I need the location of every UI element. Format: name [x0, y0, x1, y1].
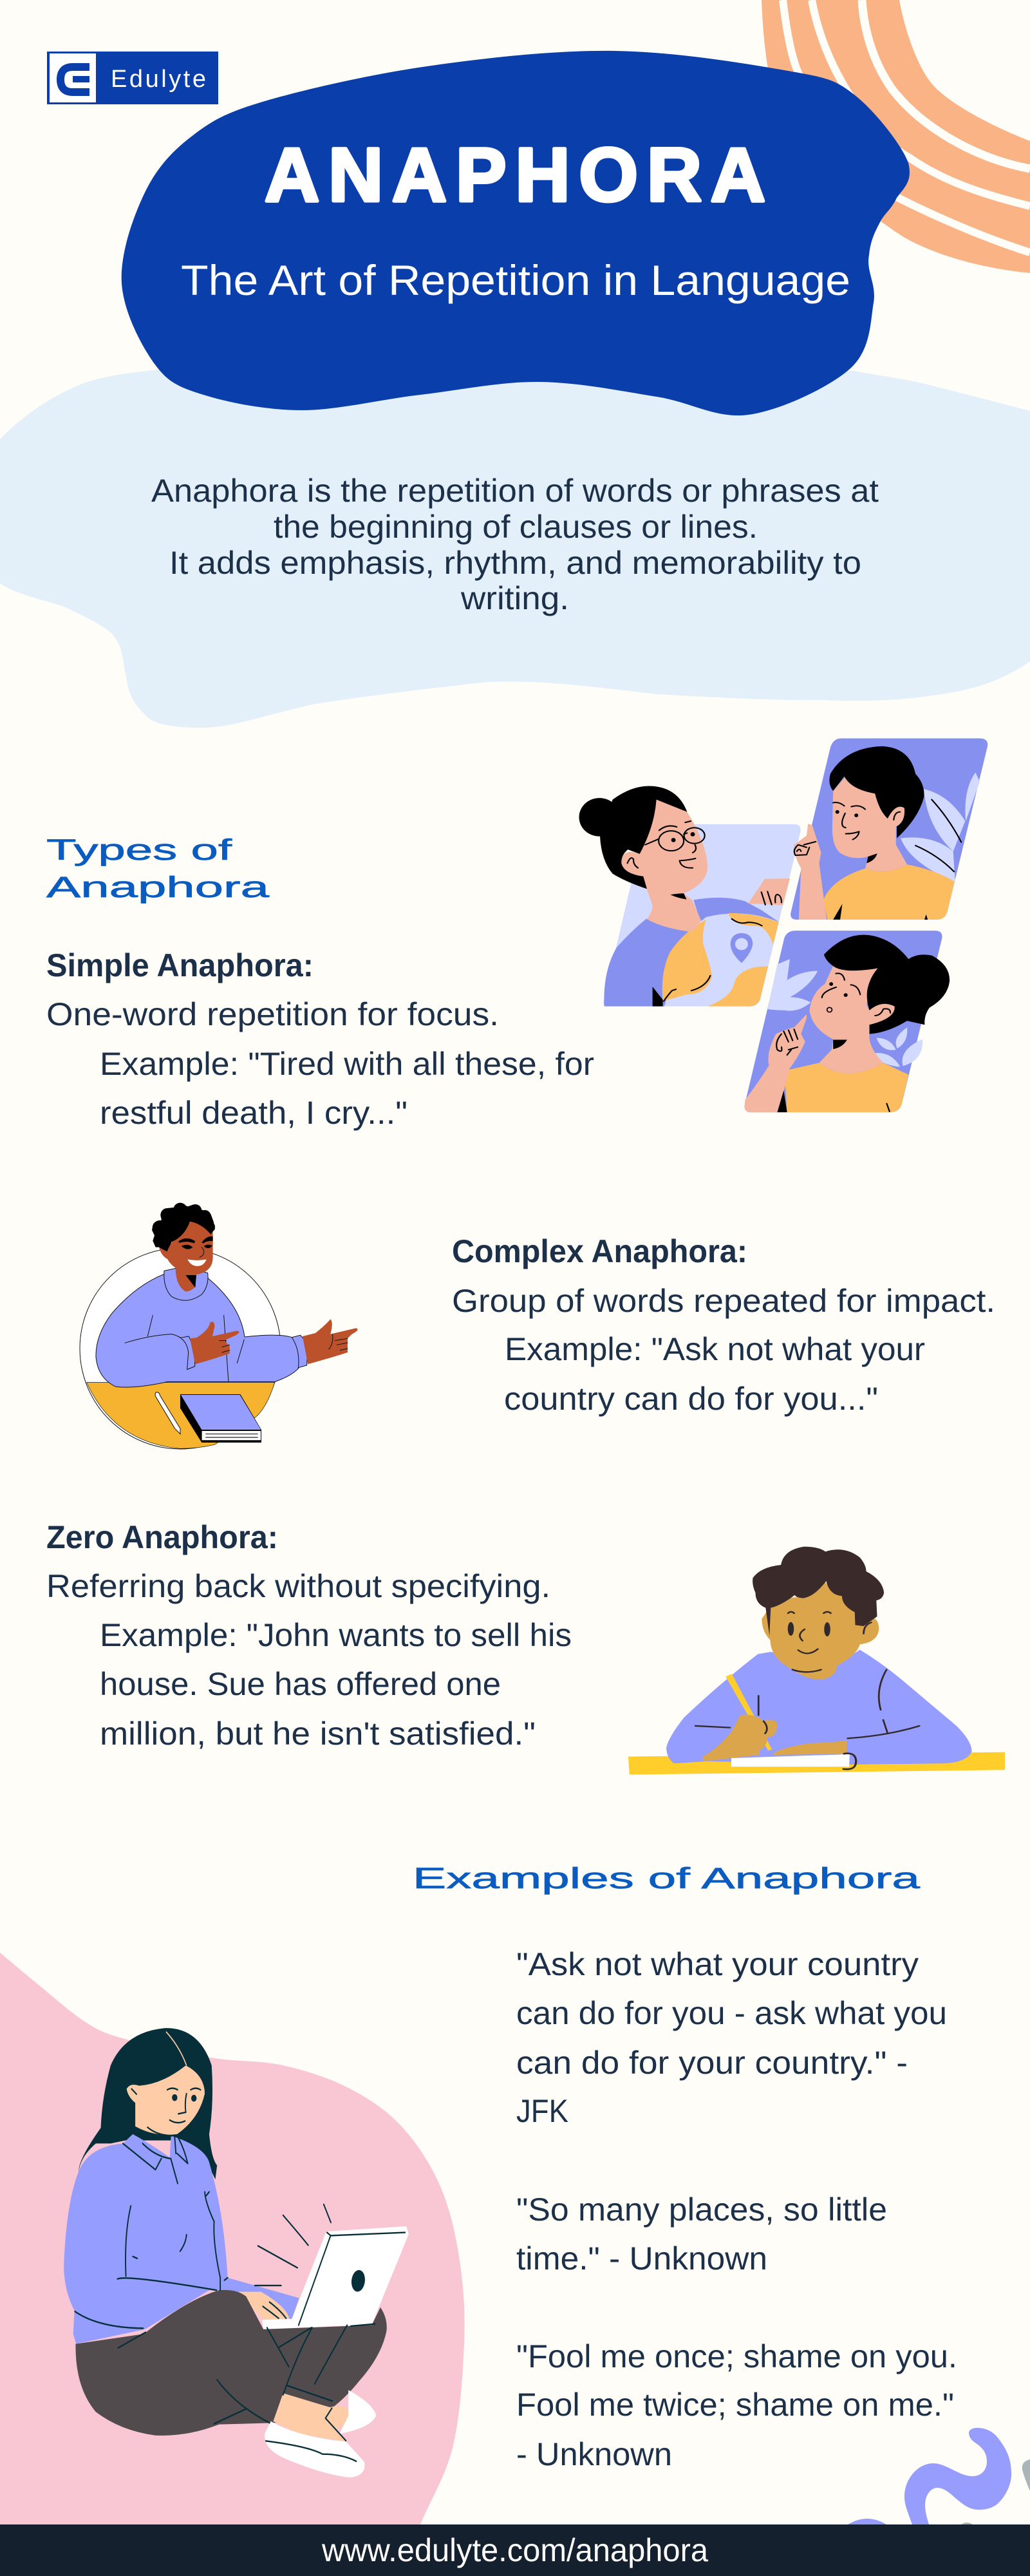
section: simple anaphora: Example: "Tired with all these, for	[100, 1046, 594, 1082]
intro text: the beginning of clauses or lines.	[274, 509, 758, 545]
section: zero anaphora: Referring back without specifying.	[46, 1568, 550, 1604]
intro text: writing.	[460, 580, 569, 616]
section: complex anaphora: country can do for you..."	[504, 1381, 878, 1417]
heading: Types of Anaphora: Anaphora	[46, 871, 270, 904]
section: complex anaphora: Complex Anaphora:	[452, 1233, 747, 1269]
section: quotes: can do for you - ask what you	[516, 1995, 947, 2031]
title: ANAPHORA	[265, 133, 765, 218]
heading: Examples of Anaphora: Examples of Anaphora	[413, 1862, 921, 1895]
section: quotes	[516, 1946, 957, 2472]
illustration: woman with laptop	[64, 2028, 409, 2477]
panel: woman with globe	[579, 786, 801, 1007]
section: simple anaphora: Simple Anaphora:	[46, 947, 314, 983]
section: zero anaphora: Zero Anaphora:	[46, 1519, 278, 1555]
illustration: three people talking	[579, 739, 988, 1112]
footer bar: www.edulyte.com/anaphora	[321, 2532, 708, 2568]
subtitle: The Art of Repetition in Language	[181, 256, 850, 304]
decoration: orange arcs	[762, 0, 1030, 273]
panel: man raising a finger	[791, 739, 988, 920]
logo: Edulyte: Edulyte	[111, 66, 206, 93]
intro text: It adds emphasis, rhythm, and memorability to	[169, 545, 861, 581]
section: complex anaphora: Example: "Ask not what your	[505, 1331, 925, 1367]
section: zero anaphora: million, but he isn't satisfied."	[100, 1716, 536, 1752]
panel: intro background blob	[0, 370, 1030, 728]
section: zero anaphora	[46, 1519, 572, 1752]
footer bar	[0, 2524, 1030, 2576]
section: complex anaphora	[452, 1233, 995, 1417]
heading: Types of Anaphora	[46, 833, 270, 904]
section: quotes: time." - Unknown	[516, 2240, 767, 2277]
intro text: Anaphora is the repetition of words or phrases at	[151, 473, 879, 509]
section: quotes: Fool me twice; shame on me."	[516, 2387, 954, 2423]
decoration: purple squiggle	[848, 2428, 1030, 2524]
section: quotes: "So many places, so little	[516, 2192, 887, 2228]
section: quotes: "Ask not what your country	[516, 1946, 919, 1982]
section: zero anaphora: Example: "John wants to sell his	[100, 1617, 572, 1653]
panel: title blob	[122, 51, 910, 415]
illustration: man pointing	[80, 1203, 358, 1449]
heading: Types of Anaphora: Types of	[46, 833, 232, 866]
section: zero anaphora: house. Sue has offered one	[100, 1666, 501, 1702]
section: simple anaphora	[46, 947, 594, 1131]
section: quotes: - Unknown	[516, 2436, 672, 2472]
illustration: boy writing at desk	[628, 1547, 1005, 1775]
section: quotes: "Fool me once; shame on you.	[516, 2338, 957, 2374]
section: complex anaphora: Group of words repeated for impact.	[452, 1283, 995, 1319]
section: quotes: JFK	[516, 2093, 568, 2129]
panel: woman thinking	[745, 931, 950, 1112]
section: simple anaphora: One-word repetition for focus.	[46, 996, 499, 1032]
section: quotes: can do for your country." -	[516, 2045, 908, 2081]
section: simple anaphora: restful death, I cry..."	[100, 1095, 407, 1131]
logo: Edulyte	[47, 52, 218, 104]
decoration: pink blob	[0, 1953, 465, 2524]
intro text	[151, 473, 879, 616]
